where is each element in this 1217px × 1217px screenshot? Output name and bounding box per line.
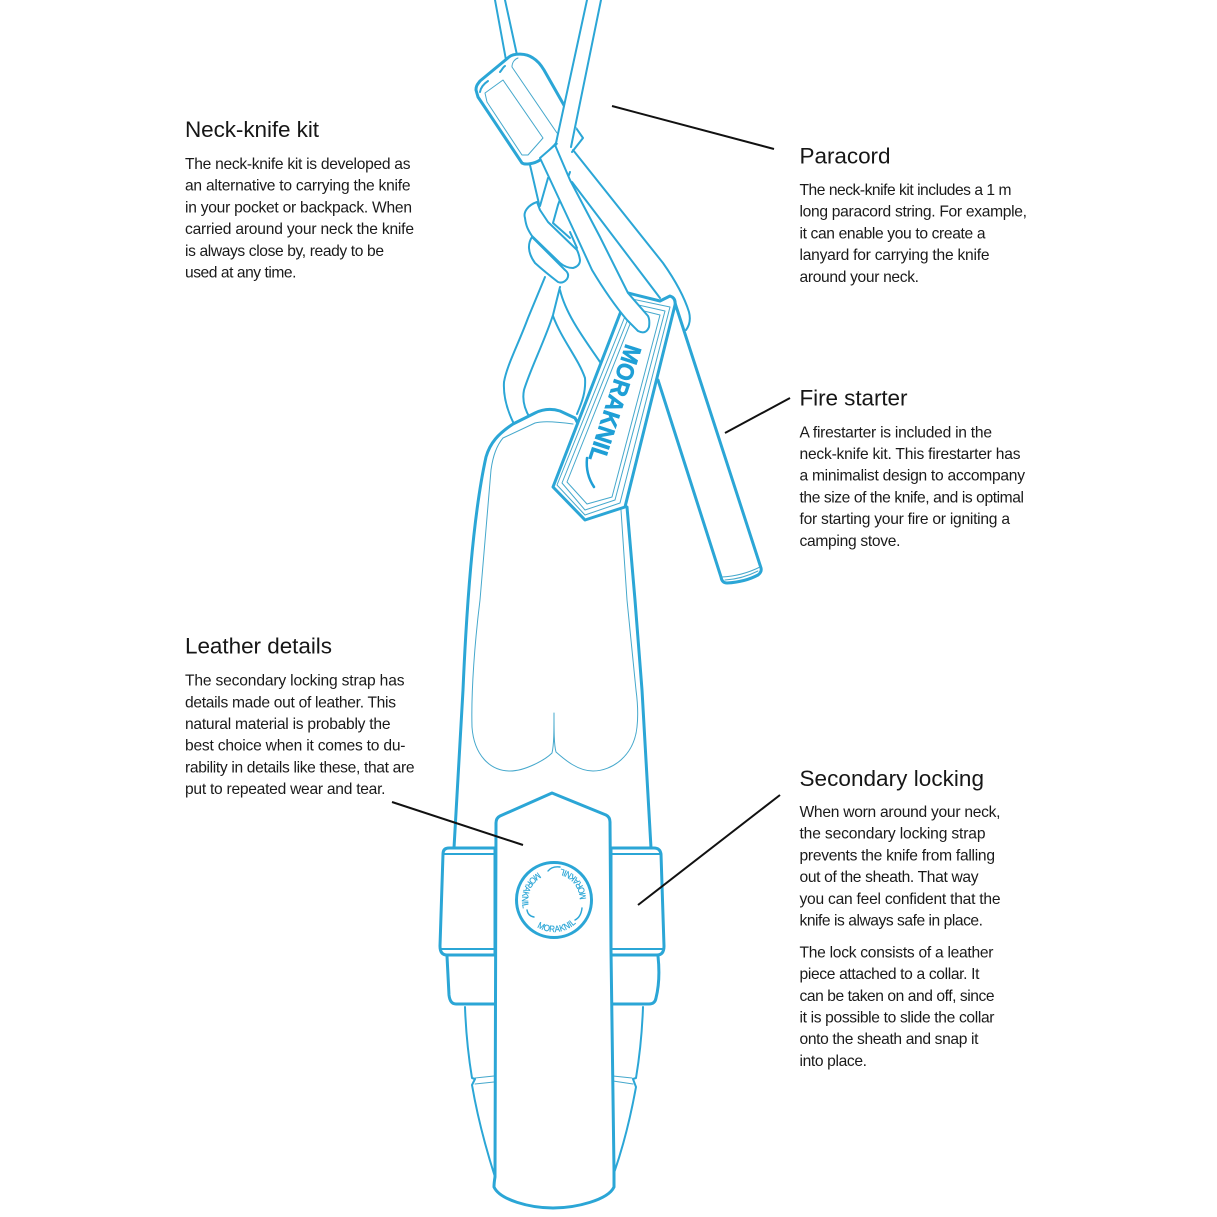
logo button bbox=[515, 861, 593, 939]
locking collar bbox=[440, 848, 664, 955]
text block: leather details bbox=[185, 634, 414, 798]
lower collar bbox=[447, 956, 659, 1004]
body: neck-knife kit. This firestarter has bbox=[800, 446, 1021, 463]
body: natural material is probably the bbox=[185, 716, 390, 733]
body bbox=[185, 156, 414, 282]
paracord: back loops bbox=[504, 150, 690, 424]
paracord: knot bbox=[525, 202, 580, 283]
heading: Secondary locking bbox=[800, 766, 984, 791]
body bbox=[800, 182, 1027, 286]
text block: neck-knife kit bbox=[185, 117, 414, 282]
text block: fire starter bbox=[800, 385, 1025, 550]
body: for starting your fire or igniting a bbox=[800, 511, 1010, 528]
body paragraph 1: you can feel confident that the bbox=[800, 891, 1000, 908]
heading: Paracord bbox=[800, 143, 890, 168]
leather strap with button bbox=[492, 792, 616, 1210]
body: the size of the knife, and is optimal bbox=[800, 489, 1024, 506]
body: The neck-knife kit is developed as bbox=[185, 156, 411, 173]
heading: Leather details bbox=[185, 634, 332, 659]
body paragraph 2: can be taken on and off, since bbox=[800, 988, 994, 1005]
body paragraph 2: The lock consists of a leather bbox=[800, 944, 994, 961]
fire starter rod bbox=[640, 300, 761, 583]
body paragraph 1: knife is always safe in place. bbox=[800, 912, 983, 930]
logo: MORAKNIL on tag: MORAKNIL bbox=[583, 341, 646, 466]
body: rability in details like these, that are bbox=[185, 759, 414, 776]
body: best choice when it comes to du- bbox=[185, 738, 406, 755]
text block: paracord bbox=[800, 143, 1027, 286]
body paragraph 1: When worn around your neck, bbox=[800, 804, 1000, 821]
body paragraph 1 bbox=[800, 804, 1000, 930]
body: long paracord string. For example, bbox=[800, 204, 1027, 221]
heading: Neck-knife kit bbox=[185, 117, 320, 142]
paracord: right strand bbox=[556, 0, 601, 150]
paracord: left strand into connector bbox=[495, 0, 517, 60]
body: around your neck. bbox=[800, 269, 919, 286]
body: an alternative to carrying the knife bbox=[185, 178, 410, 195]
body: camping stove. bbox=[800, 533, 900, 550]
body paragraph 2: onto the sheath and snap it bbox=[800, 1031, 979, 1048]
lower sheath tip bbox=[465, 1007, 643, 1177]
illustration: neck-knife kit bbox=[438, 0, 763, 1210]
body: put to repeated wear and tear. bbox=[185, 781, 386, 798]
cord connector bbox=[476, 54, 583, 164]
leader line: leather details bbox=[392, 802, 523, 845]
body bbox=[185, 673, 414, 798]
body paragraph 2 bbox=[800, 944, 994, 1070]
body: a minimalist design to accompany bbox=[800, 468, 1025, 485]
body: is always close by, ready to be bbox=[185, 243, 384, 260]
body paragraph 2: into place. bbox=[800, 1053, 867, 1070]
sheath body bbox=[454, 409, 651, 848]
leader line: secondary locking bbox=[638, 795, 780, 905]
body bbox=[800, 424, 1025, 550]
body: A firestarter is included in the bbox=[800, 424, 992, 441]
heading: Fire starter bbox=[800, 385, 908, 410]
logo button: MORAKNIL bbox=[560, 868, 586, 900]
body paragraph 1: the secondary locking strap bbox=[800, 826, 986, 843]
logo button: MORAKNIL bbox=[537, 920, 576, 932]
paracord: front strand through tag bbox=[540, 145, 649, 332]
body: in your pocket or backpack. When bbox=[185, 199, 412, 216]
body paragraph 1: prevents the knife from falling bbox=[800, 847, 995, 864]
body: The neck-knife kit includes a 1 m bbox=[800, 182, 1012, 199]
leader line: paracord bbox=[612, 106, 774, 149]
body paragraph 2: it is possible to slide the collar bbox=[800, 1010, 994, 1026]
body: details made out of leather. This bbox=[185, 694, 396, 711]
firestarter handle tag with logo bbox=[553, 293, 675, 520]
body paragraph 2: piece attached to a collar. It bbox=[800, 966, 980, 983]
body paragraph 1: out of the sheath. That way bbox=[800, 869, 979, 886]
body: The secondary locking strap has bbox=[185, 673, 405, 690]
body: it can enable you to create a bbox=[800, 225, 986, 242]
text block: secondary locking bbox=[800, 766, 1000, 1070]
body: lanyard for carrying the knife bbox=[800, 247, 990, 264]
body: used at any time. bbox=[185, 264, 296, 282]
body: carried around your neck the knife bbox=[185, 221, 414, 238]
leader line: fire starter bbox=[725, 398, 790, 433]
logo button: MORAKNIL bbox=[522, 872, 542, 908]
